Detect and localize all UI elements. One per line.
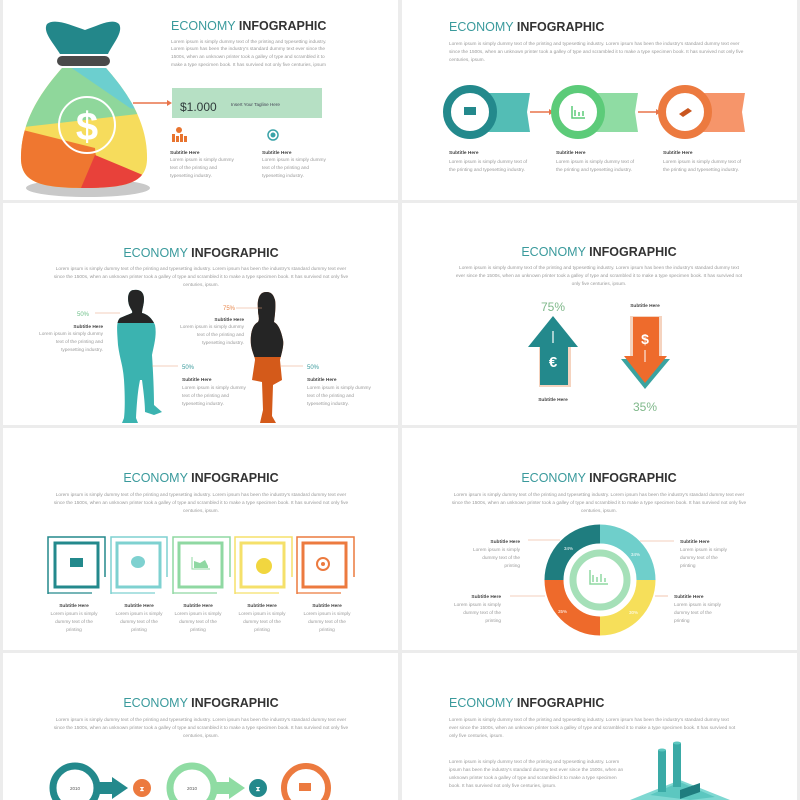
icon: coin cycle [268,130,278,140]
text block [456,265,743,287]
callout: 50% woman: Lorem ipsum is simply dummy [307,385,371,391]
text block: ever since the 1500s, when an unknown printer took a galley of type and scrambled it to make a type specimen book. It has survived not [449,725,736,731]
text blocks [51,603,98,633]
text block: paragraph [449,759,623,789]
icon: woman silhouette [250,292,284,423]
panel: slide 5 five squares: dummy text of the [308,619,346,625]
ring chart [554,534,646,626]
text block: subtitle 2: Lorem ipsum is simply dummy [262,157,326,163]
callout: 50% man [152,365,246,407]
callout: top-left [473,539,560,569]
step square 5 [297,537,354,594]
text block: Lorem ipsum is simply dummy text of the printing and typesetting industry. Lorem ipsum has been the industry's standard dummy text ever [56,266,347,272]
panel: slide 5 five squares: printing [131,627,147,633]
text block: only five centuries, ipsum. [572,281,626,287]
text block [449,717,736,739]
callout: 75% [180,306,262,346]
panel: slide 2 process circles: the printing and typesetting industry. [663,167,739,173]
callout: top-right: Subtitle Here [680,539,710,545]
text block: centuries, ipsum. [183,733,219,739]
step 1 [447,89,530,135]
text block: paragraph: Lorem ipsum is simply dummy text of the printing and typesetting industry. Lorem [449,759,619,765]
callout: top-left: printing [504,563,520,569]
callout: 75%: Subtitle Here [214,317,244,323]
title: ECONOMY INFOGRAPHIC [123,471,279,485]
panel: slide 5 five squares: printing [319,627,335,633]
panel: slide 5 five squares: Lorem ipsum is simply [175,611,222,617]
text block: since the 1500s, when an unknown printer took a galley of type and scrambled it to make a type specimen book. It has survived not only five [54,500,349,506]
text: 35%: 35% [633,400,657,414]
step 3 [284,766,328,800]
callout: 50% man: text of the printing and [182,393,229,399]
callout: 50% left: typesetting industry. [61,347,103,353]
callout: 75%: text of the printing and [197,332,244,338]
text block: Lorem ipsum is simply dummy text of the printing and typesetting industry. Lorem ipsum has been the industry's standard dummy text ever [56,717,347,723]
panel: slide 4 up/down arrows [402,203,797,425]
text block: Lorem ipsum is simply dummy text of the printing and typesetting industry. [171,39,326,45]
text block [54,717,349,739]
step square 3 [173,537,230,594]
arrow [638,109,661,115]
icon: down arrow dollar: $ [641,331,649,347]
callout: top-right [640,539,728,569]
panel: slide 2 process circles [402,0,797,200]
text block: subtitle 1: Lorem ipsum is simply dummy [170,157,234,163]
callout: 50% left: Subtitle Here [73,324,103,330]
panel: slide 2 process circles: Subtitle Here [556,150,586,156]
panel: slide 5 five squares: dummy text of the [179,619,217,625]
text block: since the 1500s, when an unknown printer took a galley of type and scrambled it to make a type specimen book. It has survived not only five [54,725,349,731]
callout: top-right: dummy text of the [680,555,718,561]
step 1: ⧗ [140,786,145,793]
callout: 75%: typesetting industry. [202,340,244,346]
callout: 50% woman: typesetting industry. [307,401,349,407]
panel: slide 5 five squares: dummy text of the [243,619,281,625]
panel: slide 5 five squares: dummy text of the [120,619,158,625]
callout: 50% woman: text of the printing and [307,393,354,399]
callout: top-right: Lorem ipsum is simply [680,547,728,553]
icon: up arrow euro: € [549,354,558,371]
icon: chart coins [172,127,187,142]
text block: paragraph: book. It has survived not only five centuries, ipsum. [449,783,556,789]
text block: ever since the 1500s, when an unknown printer took a galley of type and scrambled it to make a type specimen book. It has survived not [456,273,743,279]
icon: down arrow dollar [621,316,670,389]
callout: 50% man: typesetting industry. [182,401,224,407]
callout: 75%: 75% [223,306,236,312]
text block: since the 1500s, when an unknown printer took a galley of type and scrambled it to make a type specimen book. It has survived not only five [54,274,349,280]
callout: 50% woman [280,365,371,407]
callout: bottom-left: Lorem ipsum is simply [454,602,502,608]
panel: slide 5 five squares: printing [190,627,206,633]
text block [452,492,747,514]
callout: 75%: Lorem ipsum is simply dummy [180,324,245,330]
step square 4 [235,537,292,594]
icon: up arrow euro [528,316,578,387]
panel: slide 5 five squares: printing [254,627,270,633]
icon: money bag: $ [76,105,98,149]
callout: 50% man: Lorem ipsum is simply dummy [182,385,246,391]
callout: top-left: Lorem ipsum is simply [473,547,521,553]
panel: slide 5 five squares: Subtitle Here [312,603,342,609]
text block [54,266,349,288]
title: ECONOMY INFOGRAPHIC [171,19,326,33]
callout: 50% woman: 50% [307,365,320,371]
title: ECONOMY INFOGRAPHIC [521,471,677,485]
text block: only five centuries, ipsum. [449,733,504,739]
text block: centuries, ipsum. [449,57,485,63]
panel: slide 2 process circles: Subtitle Here [663,150,693,156]
callout: bottom-right: printing [674,618,690,624]
arrow [530,109,554,115]
text block: paragraph: unknown printer took a galley of type and scrambled it to make a type specimen [449,775,617,781]
step square 2 [111,537,167,594]
text blocks: the printing and typesetting industry. [449,167,525,173]
panel: slide 8 factory [402,653,797,800]
callout: top-right: printing [680,563,696,569]
text block: Lorem ipsum is simply dummy text of the printing and typesetting industry. Lorem ipsum has been the industry's standard dummy text [449,717,730,723]
title: ECONOMY INFOGRAPHIC [521,245,677,259]
panel: slide 7 timeline circles [3,653,398,800]
panel: slide 5 five squares: Lorem ipsum is simply [304,611,351,617]
step 1: 2010 [70,786,81,791]
step 1 [53,766,151,800]
text block: subtitle 1: Subtitle Here [170,150,200,156]
panel: slide 3 people silhouettes [3,203,398,428]
text block: Lorem ipsum has been the industry's standard dummy text ever since the [171,46,325,52]
callout: price box: Insert Your Tagline Here [231,102,280,107]
icon: man silhouette [117,290,162,423]
text block: Lorem ipsum is simply dummy text of the printing and typesetting industry. Lorem ipsum has been the industry's standard dummy text ever [449,41,740,47]
text blocks: Lorem ipsum is simply [51,611,98,617]
callout: 50% left: Lorem ipsum is simply dummy [39,331,104,337]
callout: 50% man: Subtitle Here [182,377,212,383]
text block: subtitle 1: typesetting industry. [170,173,212,179]
text block: since the 1500s, when an unknown printer took a galley of type and scrambled it to make a type specimen book. It has survived not only five [452,500,747,506]
text: 75%: 75% [541,300,565,314]
callout: price box [172,88,322,118]
icon: money bag [15,22,155,197]
text block: subtitle 1: text of the printing and [170,165,217,171]
text block [54,492,349,514]
ring chart: 34% [564,546,573,551]
text block: Lorem ipsum is simply dummy text of the printing and typesetting industry. Lorem ipsum has been the industry's standard dummy text ever [56,492,347,498]
callout: bottom-left: printing [485,618,501,624]
text: subtitle down: Subtitle Here [630,303,660,309]
panel: slide 5 five squares: Subtitle Here [247,603,277,609]
title: ECONOMY INFOGRAPHIC [449,20,604,34]
text block: subtitle 2: typesetting industry. [262,173,304,179]
text blocks: dummy text of the [55,619,93,625]
step square 1 [48,537,105,594]
callout: bottom-right: Subtitle Here [674,594,704,600]
text blocks: Subtitle Here [449,150,479,156]
text blocks: printing [66,627,82,633]
text block: centuries, ipsum. [581,508,617,514]
text block: Lorem ipsum is simply dummy text of the printing and typesetting industry. Lorem ipsum has been the industry's standard dummy text ever [454,492,745,498]
panel: slide 2 process circles: the printing and typesetting industry. [556,167,632,173]
panel: slide 5 five squares [3,428,398,650]
callout: 50% woman: Subtitle Here [307,377,337,383]
callout: top-left: dummy text of the [482,555,520,561]
callout: top-left: Subtitle Here [490,539,520,545]
panel: slide 2 process circles: Lorem ipsum is simply dummy text of [663,159,742,165]
callout: bottom-left [454,594,545,624]
arrow [133,100,172,106]
text block: centuries, ipsum. [183,508,219,514]
callout: 50% left: text of the printing and [56,339,103,345]
text block: subtitle 2 [262,150,326,179]
callout: bottom-left: Subtitle Here [471,594,501,600]
title: ECONOMY INFOGRAPHIC [449,696,604,710]
title: ECONOMY INFOGRAPHIC [123,696,279,710]
callout: 50% left [39,312,120,353]
text block [449,41,744,63]
icon: factory [630,742,730,800]
text blocks [449,150,528,173]
step 2: 2010 [187,786,198,791]
text block: subtitle 1 [170,150,234,179]
callout: bottom-left: dummy text of the [463,610,501,616]
panel: slide 6 ring chart [402,428,797,650]
text block: centuries, ipsum. [183,282,219,288]
text block [171,39,326,68]
ring chart: 35% [558,609,567,614]
title: ECONOMY INFOGRAPHIC [123,246,279,260]
ring chart: 30% [629,610,638,615]
callout: price box: $1.000 [180,100,217,114]
step 2 [555,89,638,135]
step 3 [662,89,745,135]
panel: slide 5 five squares: Lorem ipsum is simply [116,611,163,617]
callout: 50% left: 50% [77,312,90,318]
panel: slide 1 money bag [3,0,398,200]
text blocks: Subtitle Here [59,603,89,609]
text block: subtitle 2: text of the printing and [262,165,309,171]
callout: bottom-right: Lorem ipsum is simply [674,602,722,608]
panel: slide 5 five squares: Subtitle Here [183,603,213,609]
text block: subtitle 2: Subtitle Here [262,150,292,156]
text block: since the 1500s, when an unknown printer took a galley of type and scrambled it to make a type specimen book. It has survived not only five [449,49,744,55]
text block: Lorem ipsum is simply dummy text of the printing and typesetting industry. Lorem ipsum has been the industry's standard dummy text [459,265,740,271]
step 2 [170,766,267,800]
text: subtitle up: Subtitle Here [538,397,568,403]
text block: paragraph: ipsum has been the industry's standard dummy text ever since the 1500s, when an [449,767,623,773]
text block: 1500s, when an unknown printer took a galley of type and scrambled it to [171,54,325,60]
callout: 50% man: 50% [182,365,195,371]
callout: bottom-right: dummy text of the [674,610,712,616]
panel: slide 5 five squares: Lorem ipsum is simply [239,611,286,617]
ring chart: 34% [631,552,640,557]
text block: make a type specimen book. It has survived not only five centuries, ipsum [171,62,326,68]
callout: bottom-right [655,594,722,624]
panel: slide 5 five squares: Subtitle Here [124,603,154,609]
step 2: ⧗ [256,786,261,793]
text blocks: Lorem ipsum is simply dummy text of [449,159,528,165]
panel: slide 2 process circles: Lorem ipsum is simply dummy text of [556,159,635,165]
